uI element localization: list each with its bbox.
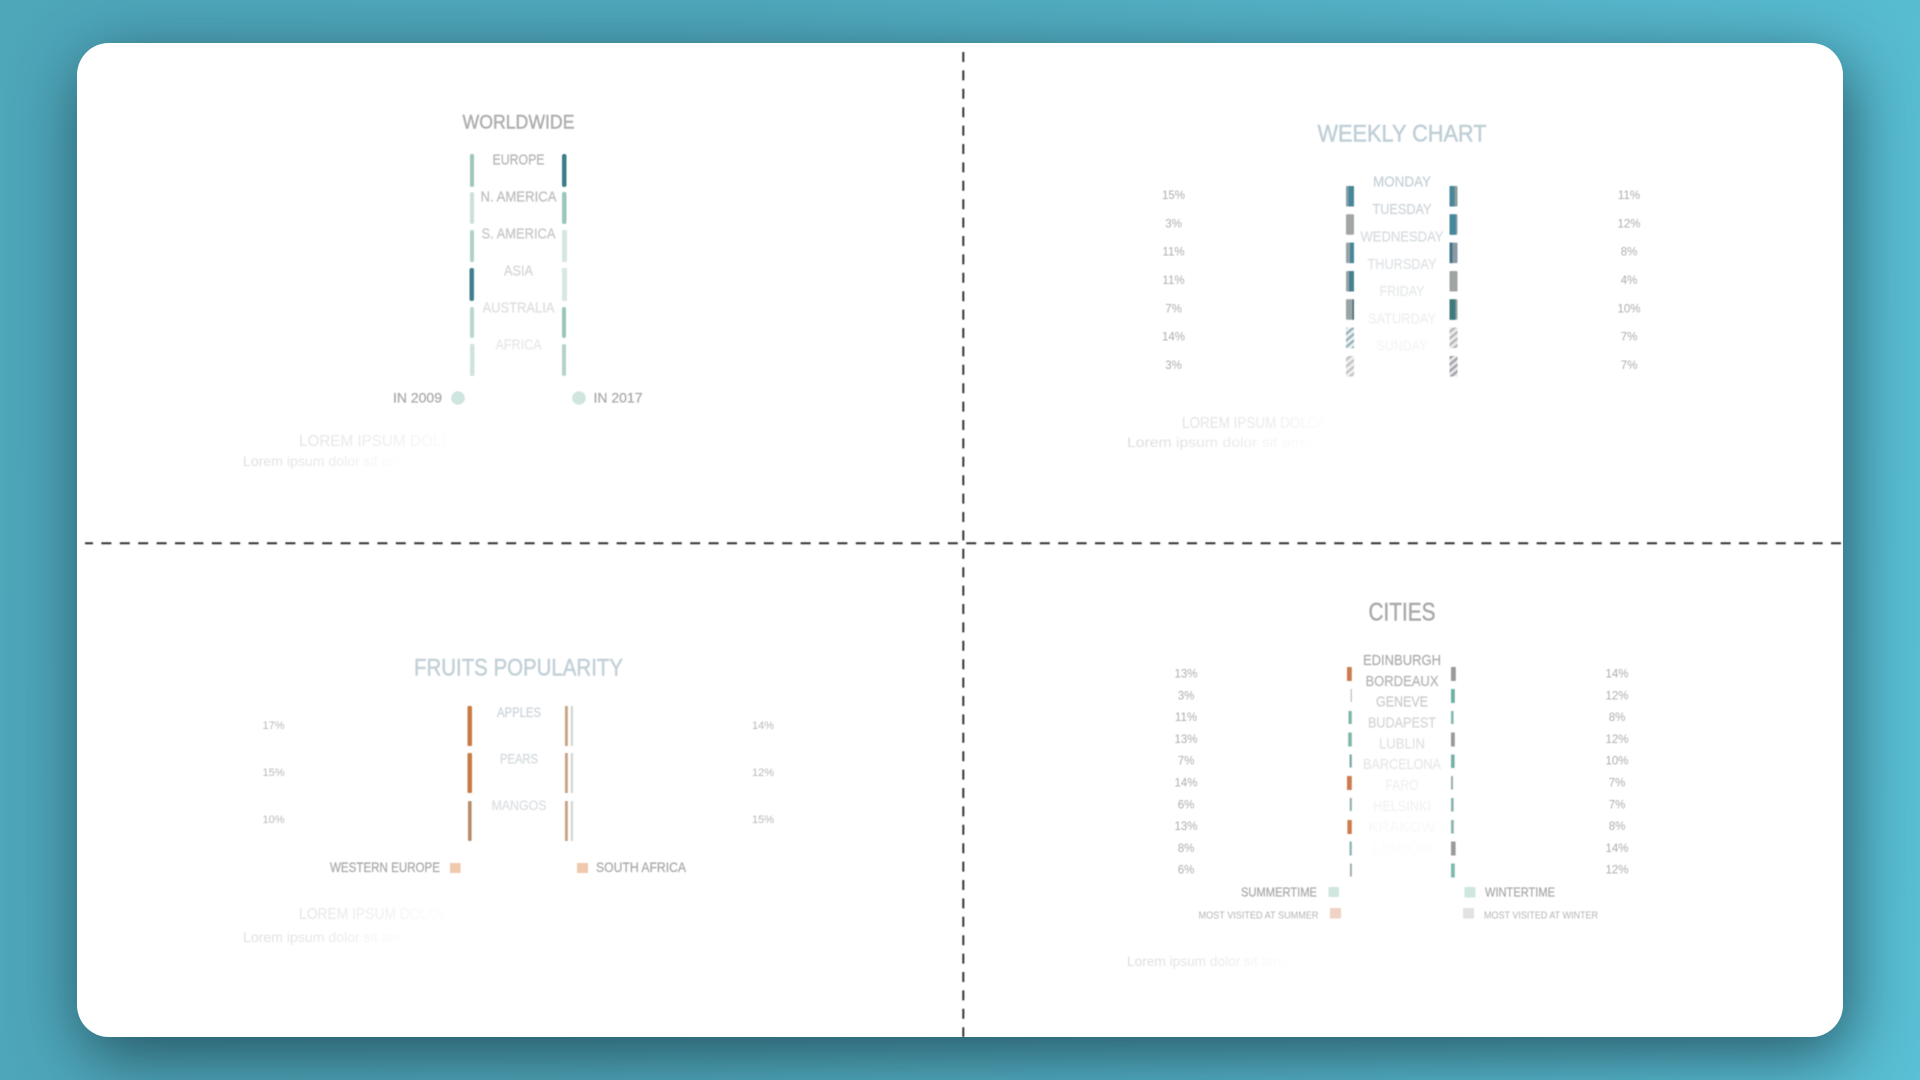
city labels xyxy=(1363,653,1441,857)
day labels: FRIDAY xyxy=(1380,284,1425,300)
heading: worldwide: WORLDWIDE xyxy=(462,112,574,134)
percentages: cities right xyxy=(1605,668,1629,877)
panel: worldwide xyxy=(243,112,643,469)
percentages: cities left xyxy=(1174,668,1198,877)
bars: cities left xyxy=(1347,667,1352,876)
percentages: cities left: 11% xyxy=(1175,712,1197,724)
heading: fruits popularity: FRUITS POPULARITY xyxy=(414,654,623,682)
percentages: weekly left xyxy=(1162,190,1185,372)
percentages: fruits right: 14% xyxy=(752,720,774,732)
percentages: cities right: 12% xyxy=(1605,734,1629,746)
day labels xyxy=(1360,174,1444,354)
city labels: BORDEAUX xyxy=(1366,674,1439,690)
fruit labels: APPLES xyxy=(497,704,541,720)
caption: weekly: LOREM IPSUM DOLOR xyxy=(1182,415,1328,432)
percentages: cities right: 12% xyxy=(1605,865,1629,877)
city labels: FARO xyxy=(1386,778,1418,794)
percentages: weekly right xyxy=(1617,190,1641,372)
legend: south africa: SOUTH AFRICA xyxy=(596,859,687,875)
percentages: fruits left: 10% xyxy=(262,814,285,826)
fruit labels xyxy=(492,704,546,813)
percentages: cities right: 8% xyxy=(1609,712,1625,724)
day labels: THURSDAY xyxy=(1368,257,1437,273)
bars: in 2009 xyxy=(470,154,474,376)
region labels: AUSTRALIA xyxy=(482,300,555,316)
region labels xyxy=(480,152,557,354)
day labels: MONDAY xyxy=(1373,174,1431,190)
percentages: weekly right: 10% xyxy=(1617,303,1641,315)
percentages: weekly left: 14% xyxy=(1162,332,1185,344)
legend: in 2009 xyxy=(393,390,465,406)
city labels: BARCELONA xyxy=(1363,757,1441,773)
percentages: weekly right: 8% xyxy=(1621,247,1637,259)
legend: western europe: WESTERN EUROPE xyxy=(330,859,440,875)
caption: weekly xyxy=(1127,415,1328,450)
percentages: cities right: 14% xyxy=(1605,843,1629,855)
caption: fruits xyxy=(243,906,449,945)
percentages: fruits right: 15% xyxy=(752,814,774,826)
percentages: cities right: 12% xyxy=(1605,690,1629,702)
percentages: cities right: 14% xyxy=(1605,668,1629,680)
caption: cities: Lorem ipsum dolor sit amet xyxy=(1127,953,1292,969)
percentages: weekly right: 7% xyxy=(1621,332,1637,344)
caption: fruits: LOREM IPSUM DOLOR xyxy=(299,906,449,923)
percentages: fruits right: 12% xyxy=(752,767,774,779)
panel: cities xyxy=(1127,598,1629,969)
percentages: fruits left: 15% xyxy=(262,767,285,779)
percentages: cities left: 6% xyxy=(1178,799,1194,811)
percentages: cities left: 13% xyxy=(1174,734,1198,746)
caption: worldwide: LOREM IPSUM DOLOR xyxy=(299,433,464,450)
legend: wintertime: WINTERTIME xyxy=(1485,884,1555,900)
bars: western europe xyxy=(468,706,472,841)
percentages: weekly left: 7% xyxy=(1165,303,1182,315)
fruit labels: MANGOS xyxy=(492,797,546,813)
fruit labels: PEARS xyxy=(500,750,538,766)
city labels: LISBON xyxy=(1372,841,1432,857)
caption: worldwide xyxy=(243,433,464,469)
percentages: cities left: 8% xyxy=(1178,843,1194,855)
percentages: weekly right: 7% xyxy=(1621,360,1637,372)
heading: weekly chart: WEEKLY CHART xyxy=(1318,120,1487,148)
panel: fruits popularity xyxy=(243,654,774,945)
region labels: EUROPE xyxy=(492,152,545,168)
region labels: S. AMERICA xyxy=(482,226,556,242)
bars: south africa xyxy=(565,706,573,841)
legend: most visited at summer: MOST VISITED AT SUMMER xyxy=(1198,910,1319,922)
region labels: AFRICA xyxy=(496,338,542,354)
percentages: weekly right: 4% xyxy=(1621,275,1637,287)
percentages: cities left: 6% xyxy=(1178,865,1194,877)
city labels: HELSINKI xyxy=(1373,799,1431,815)
percentages: weekly right: 11% xyxy=(1618,190,1640,202)
percentages: cities right: 7% xyxy=(1609,778,1625,790)
panel: weekly chart xyxy=(1127,120,1641,450)
legend: in 2017: IN 2017 xyxy=(594,390,643,406)
bars: cities right xyxy=(1451,667,1456,878)
caption: weekly: Lorem ipsum dolor sit amet xyxy=(1127,434,1317,450)
percentages: cities left: 7% xyxy=(1178,756,1194,768)
legend: most visited at winter xyxy=(1463,908,1598,922)
city labels: KRAKOW xyxy=(1368,820,1436,836)
percentages: weekly right: 12% xyxy=(1617,218,1641,230)
region labels: ASIA xyxy=(504,264,533,280)
percentages: cities left: 3% xyxy=(1178,690,1194,702)
legend: wintertime xyxy=(1464,884,1555,900)
percentages: cities right: 10% xyxy=(1605,756,1629,768)
percentages: fruits left xyxy=(262,720,285,826)
region labels: N. AMERICA xyxy=(480,190,557,206)
legend: in 2009: IN 2009 xyxy=(393,390,442,406)
caption: fruits: Lorem ipsum dolor sit amet xyxy=(243,929,413,945)
percentages: cities left: 14% xyxy=(1174,778,1198,790)
city labels: GENEVE xyxy=(1376,694,1428,710)
heading: cities: CITIES xyxy=(1368,598,1436,626)
day labels: TUESDAY xyxy=(1372,202,1432,218)
percentages: cities right: 8% xyxy=(1609,821,1625,833)
city labels: LUBLIN xyxy=(1379,736,1425,752)
percentages: fruits left: 17% xyxy=(262,720,285,732)
bars: in 2017 xyxy=(562,154,567,376)
city labels: EDINBURGH xyxy=(1363,653,1441,669)
day labels: WEDNESDAY xyxy=(1360,230,1444,246)
legend: in 2017 xyxy=(572,390,643,406)
bars: weekly left xyxy=(1346,186,1354,376)
percentages: cities left: 13% xyxy=(1174,668,1198,680)
city labels: BUDAPEST xyxy=(1368,716,1436,732)
legend: most visited at winter: MOST VISITED AT WINTER xyxy=(1484,910,1598,922)
percentages: weekly left: 11% xyxy=(1162,247,1185,259)
percentages: weekly left: 11% xyxy=(1162,275,1185,287)
day labels: SUNDAY xyxy=(1376,338,1428,354)
percentages: weekly left: 15% xyxy=(1162,190,1185,202)
day labels: SATURDAY xyxy=(1368,312,1436,328)
legend: summertime: SUMMERTIME xyxy=(1241,884,1317,900)
bars: weekly right xyxy=(1450,186,1458,376)
percentages: weekly left: 3% xyxy=(1165,218,1182,230)
percentages: weekly left: 3% xyxy=(1165,360,1182,372)
percentages: cities left: 13% xyxy=(1174,821,1198,833)
percentages: cities right: 7% xyxy=(1609,799,1625,811)
caption: worldwide: Lorem ipsum dolor sit amet xyxy=(243,453,413,469)
percentages: fruits right xyxy=(752,720,774,826)
